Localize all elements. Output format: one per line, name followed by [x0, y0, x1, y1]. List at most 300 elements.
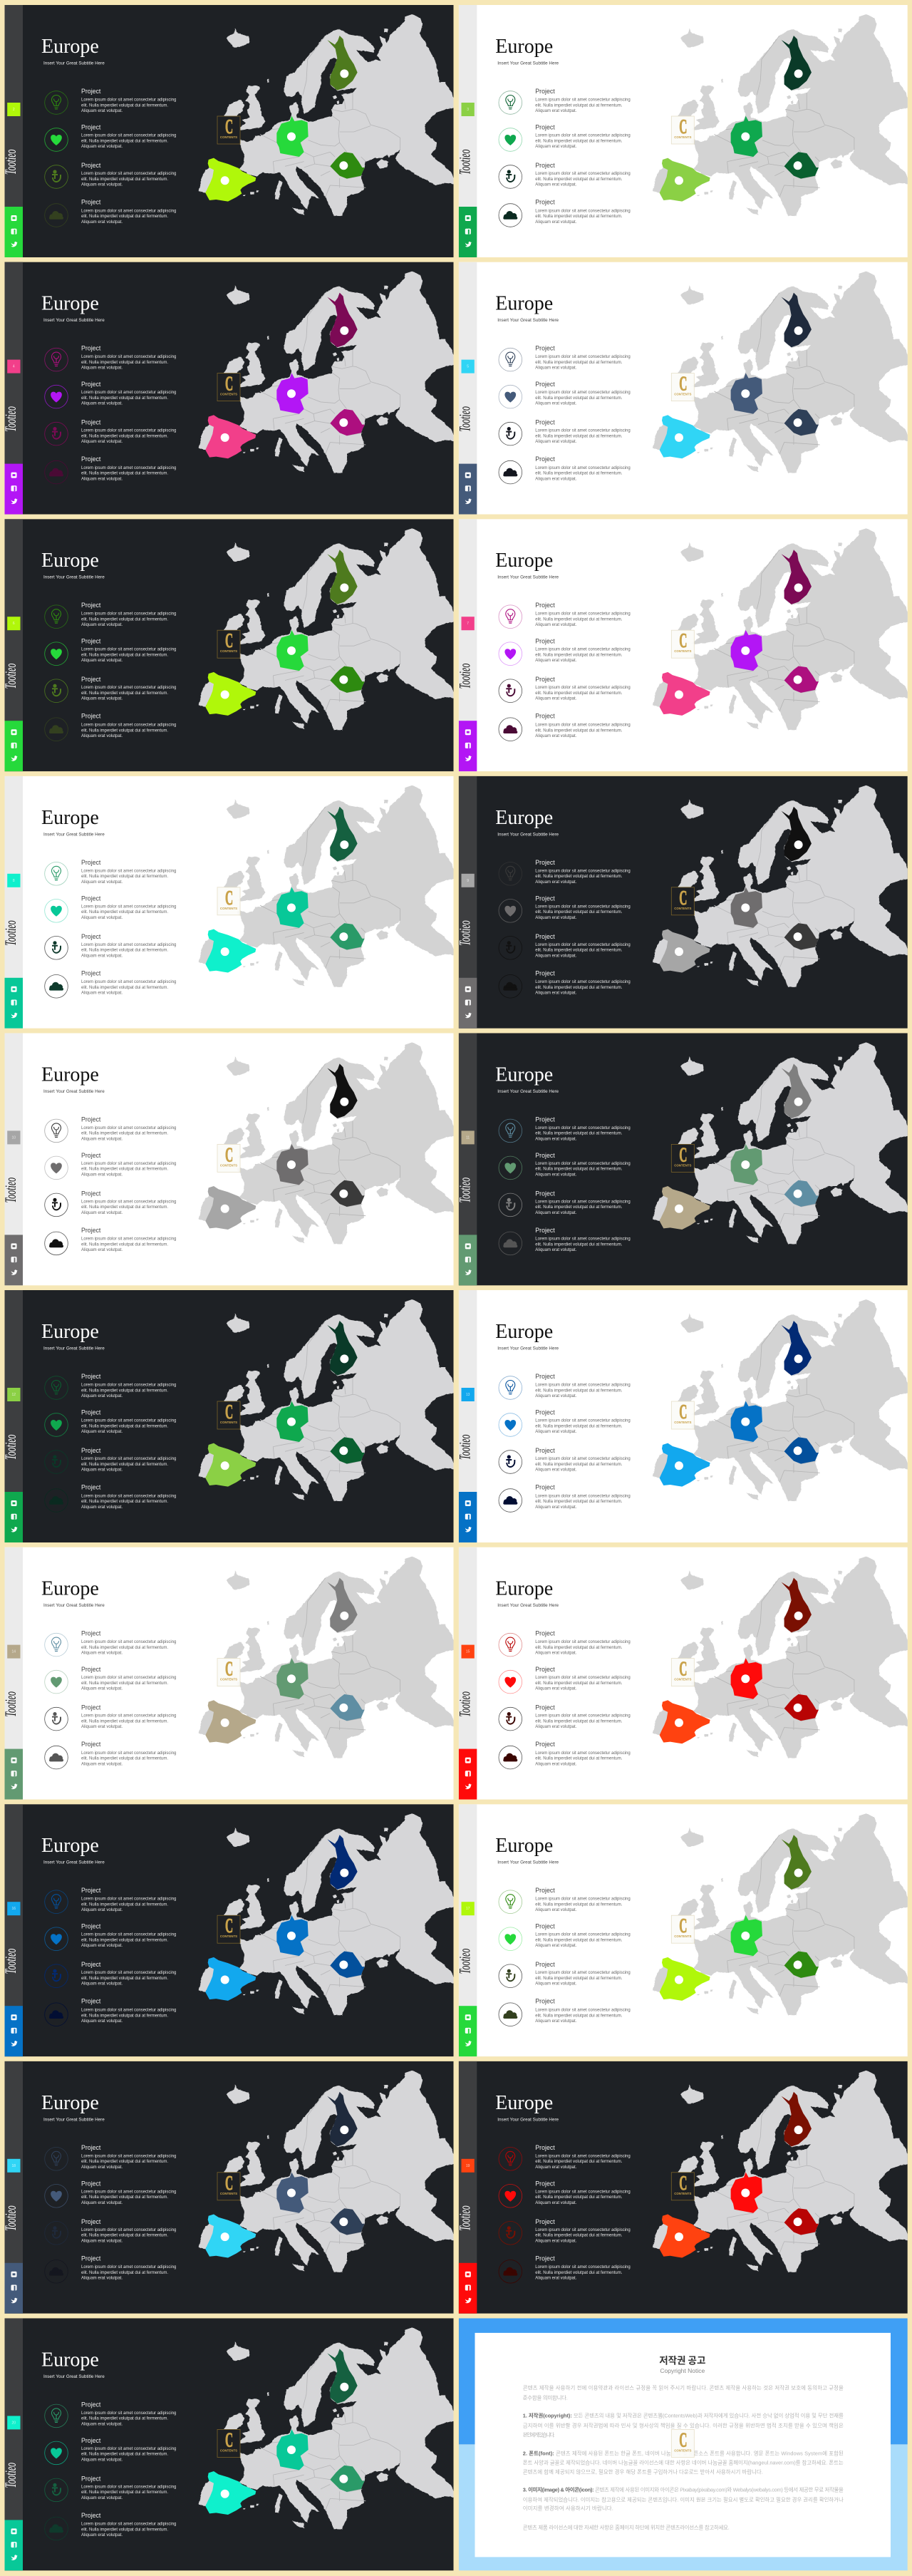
project 1 — [499, 1887, 631, 1913]
text 2: Lorem ipsum dolor sit amet consectetur adipiscing — [81, 391, 176, 395]
panel: slide 2 dark lime — [1, 5, 453, 257]
text 1: elit. Nulla imperdiet volutpat dui at fermentum. — [81, 2160, 168, 2164]
icon: bulb — [45, 1376, 68, 1399]
text 4: Project — [535, 1998, 555, 2005]
icon: bulb — [499, 1633, 522, 1657]
text 1: Lorem ipsum dolor sit amet consectetur adipiscing — [81, 1383, 176, 1387]
panel: slide 5 white navy — [455, 262, 908, 515]
icon: heart — [499, 1670, 522, 1694]
icon: cloud — [499, 1489, 522, 1512]
text 4 — [535, 1998, 631, 2024]
icon: bulb — [499, 1376, 522, 1399]
text 3: elit. Nulla imperdiet volutpat dui at fermentum. — [81, 434, 168, 438]
sidebar: 20 — [12, 2421, 16, 2425]
text 2: Aliquam erat volutpat. — [81, 2201, 123, 2205]
notice body: 이미지를 변경하여 사용하시기 바랍니다. — [523, 2505, 613, 2511]
sidebar: Tootieo — [455, 406, 473, 432]
country: Romania — [330, 1180, 365, 1207]
text 3: elit. Nulla imperdiet volutpat dui at fermentum. — [535, 1719, 623, 1724]
title: 저작권 공고 — [659, 2352, 705, 2366]
sidebar: 16 — [12, 1907, 16, 1911]
logo: CONTENTS — [674, 135, 691, 139]
text 2: Aliquam erat volutpat. — [535, 659, 577, 663]
text 2: Project — [535, 1408, 555, 1416]
icon: bulb — [45, 1633, 68, 1657]
text 4: Aliquam erat volutpat. — [81, 991, 123, 996]
text 1 — [81, 1373, 176, 1398]
subtitle: Insert Your Great Subtitle Here — [497, 1603, 559, 1608]
country: Romania — [784, 1952, 819, 1978]
text 1: Lorem ipsum dolor sit amet consectetur adipiscing — [81, 1897, 176, 1902]
text 2: Project — [535, 381, 555, 388]
country: Germany — [731, 373, 762, 414]
text 1: elit. Nulla imperdiet volutpat dui at fermentum. — [535, 875, 623, 879]
text 3: Project — [535, 1190, 555, 1197]
text 4: Project — [81, 455, 101, 463]
text 2 — [535, 381, 631, 406]
text 4: elit. Nulla imperdiet volutpat dui at fermentum. — [81, 1757, 168, 1761]
text 3: Lorem ipsum dolor sit amet consectetur adipiscing — [535, 1200, 631, 1204]
country: Spain — [660, 929, 710, 972]
text 2 — [81, 1923, 176, 1948]
logo: C — [225, 2172, 233, 2194]
text 4 — [81, 1998, 176, 2024]
text 4: elit. Nulla imperdiet volutpat dui at fermentum. — [535, 472, 623, 476]
text 3: elit. Nulla imperdiet volutpat dui at fermentum. — [81, 177, 168, 182]
map: Europe — [198, 1813, 456, 2016]
icon: person — [499, 1707, 522, 1731]
logo: CONTENTS — [674, 1163, 691, 1167]
text 3 — [535, 162, 631, 187]
logo: C — [225, 1915, 233, 1937]
text 1: elit. Nulla imperdiet volutpat dui at fermentum. — [81, 1389, 168, 1393]
icon: bulb — [45, 91, 68, 114]
text 4: Aliquam erat volutpat. — [535, 734, 577, 738]
text 2: Aliquam erat volutpat. — [81, 1173, 123, 1177]
text 1: Project — [535, 345, 555, 352]
icon: heart — [45, 128, 68, 151]
title: Europe — [495, 293, 553, 315]
text 4 — [535, 1741, 631, 1766]
icon: bulb — [45, 605, 68, 629]
project 4 — [45, 198, 176, 227]
subtitle: Insert Your Great Subtitle Here — [43, 1603, 105, 1608]
text 2 — [535, 1152, 631, 1177]
text 4: Aliquam erat volutpat. — [81, 1762, 123, 1766]
project 3 — [499, 1447, 631, 1473]
notice body: 콘텐츠 제작을 사용하기 전에 이용약관과 라이선스 규정을 꼭 읽어 주시기 바랍니다. 콘텐츠 제작을 사용하는 것은 저작권 보호에 동의하고 규정을 — [523, 2384, 844, 2391]
project 2 — [499, 1666, 631, 1694]
project 2 — [45, 1408, 176, 1436]
text 4: Lorem ipsum dolor sit amet consectetur adipiscing — [81, 466, 176, 470]
logo: C — [679, 887, 687, 909]
text 4: elit. Nulla imperdiet volutpat dui at fermentum. — [81, 1243, 168, 1247]
country: Germany — [731, 887, 762, 928]
project 3 — [45, 162, 176, 188]
map: Europe — [198, 785, 456, 987]
country: Spain — [205, 415, 256, 458]
text 4: elit. Nulla imperdiet volutpat dui at fermentum. — [81, 2528, 168, 2532]
text 2: Aliquam erat volutpat. — [81, 2458, 123, 2462]
map: Europe — [198, 528, 456, 731]
project 2 — [499, 1923, 631, 1950]
icon: heart — [499, 1156, 522, 1180]
project 4 — [45, 455, 176, 484]
text 3: Lorem ipsum dolor sit amet consectetur adipiscing — [81, 943, 176, 947]
text 3: Lorem ipsum dolor sit amet consectetur adipiscing — [81, 429, 176, 433]
title: Europe — [41, 550, 99, 572]
text 2: Project — [535, 1152, 555, 1159]
text 4 — [81, 969, 176, 996]
text 2: elit. Nulla imperdiet volutpat dui at fermentum. — [535, 1681, 623, 1686]
text 1: Project — [535, 602, 555, 609]
text 3 — [535, 676, 631, 701]
text 4: Aliquam erat volutpat. — [535, 1505, 577, 1510]
text 2: Lorem ipsum dolor sit amet consectetur adipiscing — [81, 2447, 176, 2451]
project 3 — [499, 1961, 631, 1987]
project 2 — [499, 2180, 631, 2207]
text 1: Lorem ipsum dolor sit amet consectetur adipiscing — [535, 1897, 631, 1902]
text 3: Lorem ipsum dolor sit amet consectetur adipiscing — [81, 686, 176, 690]
text 4: elit. Nulla imperdiet volutpat dui at fermentum. — [535, 986, 623, 990]
text 2: elit. Nulla imperdiet volutpat dui at fermentum. — [81, 1424, 168, 1428]
project 3 — [45, 1961, 176, 1987]
sidebar: Tootieo — [1, 1691, 19, 1717]
text 1: Lorem ipsum dolor sit amet consectetur adipiscing — [535, 612, 631, 617]
text 2: Project — [81, 638, 101, 645]
text 3: Aliquam erat volutpat. — [535, 1982, 577, 1987]
title: Europe — [495, 550, 553, 572]
text 4: Lorem ipsum dolor sit amet consectetur adipiscing — [81, 1751, 176, 1756]
sidebar: 4 — [13, 365, 15, 369]
sidebar: Tootieo — [1, 920, 19, 946]
text 3: Aliquam erat volutpat. — [535, 182, 577, 187]
text 4: elit. Nulla imperdiet volutpat dui at fermentum. — [81, 986, 168, 990]
text 4: Aliquam erat volutpat. — [535, 991, 577, 996]
project 3 — [45, 676, 176, 703]
icon: person — [45, 679, 68, 703]
panel: slide 11 dark tan — [455, 1033, 908, 1286]
text 2: Project — [81, 1152, 101, 1159]
text 2: Project — [535, 1666, 555, 1673]
sidebar: Tootieo — [1, 1178, 19, 1202]
panel: slide 8 white teal — [1, 776, 453, 1029]
text 1: Aliquam erat volutpat. — [535, 366, 577, 371]
project 4 — [499, 969, 631, 998]
text 3: Project — [535, 1447, 555, 1454]
project 3 — [45, 2218, 176, 2245]
logo — [671, 373, 694, 401]
text 3 — [535, 1704, 631, 1729]
title: Europe — [41, 293, 99, 315]
icon: bulb — [499, 1119, 522, 1143]
icon: person — [499, 1193, 522, 1217]
text 1 — [81, 1116, 176, 1141]
text 1: Project — [81, 859, 101, 866]
text 4: Lorem ipsum dolor sit amet consectetur adipiscing — [81, 2265, 176, 2270]
text 1: Lorem ipsum dolor sit amet consectetur adipiscing — [81, 355, 176, 359]
icon: cloud — [45, 1746, 68, 1769]
country: Germany — [276, 1144, 309, 1185]
sidebar — [1, 1547, 23, 1800]
text 1: Lorem ipsum dolor sit amet consectetur adipiscing — [535, 869, 631, 873]
logo — [671, 1658, 694, 1686]
text 3: elit. Nulla imperdiet volutpat dui at fermentum. — [81, 691, 168, 696]
notice body: 3. 이미지(image) & 아이콘(icon): 콘텐츠 제작에 사용된 이미지와 아이콘은 Pixabay(pixabay.com)와 Webalys(webalys.com) 등에서 제공한 무료 저작물을 — [523, 2486, 844, 2493]
text 4 — [81, 1227, 176, 1252]
logo: CONTENTS — [220, 907, 237, 910]
icon: bulb — [499, 605, 522, 629]
text 3: Lorem ipsum dolor sit amet consectetur adipiscing — [535, 686, 631, 690]
text 1 — [535, 859, 631, 885]
icon: heart — [499, 2184, 522, 2207]
text 3: Project — [535, 676, 555, 683]
text 2: Aliquam erat volutpat. — [535, 402, 577, 406]
logo: CONTENTS — [674, 1421, 691, 1424]
icon: cloud — [499, 204, 522, 227]
country: Finland — [782, 1321, 812, 1376]
sidebar — [1, 776, 23, 1029]
text 3 — [81, 1704, 176, 1729]
sidebar: Tootieo — [1, 1434, 19, 1460]
text 1: Aliquam erat volutpat. — [81, 1908, 123, 1912]
sidebar — [455, 5, 477, 257]
text 3: Project — [81, 676, 101, 683]
text 4 — [81, 2255, 176, 2281]
project 4 — [499, 455, 631, 484]
project 3 — [45, 1704, 176, 1731]
text 2: elit. Nulla imperdiet volutpat dui at fermentum. — [81, 1681, 168, 1686]
country: Finland — [782, 36, 812, 91]
icon: cloud — [499, 975, 522, 998]
text 3 — [81, 1190, 176, 1215]
country: Spain — [205, 2214, 256, 2257]
text 4: Project — [81, 2512, 101, 2519]
icon: heart — [45, 1670, 68, 1694]
text 3: Project — [81, 1190, 101, 1197]
text 4 — [535, 713, 631, 738]
project 1 — [45, 1373, 176, 1399]
text 3: elit. Nulla imperdiet volutpat dui at fermentum. — [81, 1719, 168, 1724]
text 1 — [535, 2144, 631, 2170]
text 2: elit. Nulla imperdiet volutpat dui at fermentum. — [535, 2195, 623, 2200]
text 4: Project — [81, 2255, 101, 2262]
country: Finland — [782, 807, 812, 861]
icon: heart — [45, 642, 68, 666]
text 4: Lorem ipsum dolor sit amet consectetur adipiscing — [81, 2523, 176, 2527]
text 1: Project — [535, 2144, 555, 2151]
logo — [217, 1915, 240, 1943]
subtitle: Insert Your Great Subtitle Here — [43, 1089, 105, 1094]
project 4 — [499, 2255, 631, 2283]
icon: heart — [499, 642, 522, 666]
project 2 — [45, 1666, 176, 1694]
text 3: Project — [81, 2475, 101, 2482]
country: Finland — [782, 293, 812, 347]
text 3 — [535, 2218, 631, 2243]
text 3: Project — [535, 1704, 555, 1711]
text 1: elit. Nulla imperdiet volutpat dui at fermentum. — [81, 875, 168, 879]
icon: person — [499, 2221, 522, 2245]
text 1: Aliquam erat volutpat. — [81, 109, 123, 113]
text 2: Aliquam erat volutpat. — [81, 145, 123, 149]
notice body: 금지하며 이를 위반할 경우 저작권법에 따라 민사 및 형사상의 책임을 질 수 있습니다. 이러한 규정을 위반하면 법적 조치를 받을 수 있으며 책임은 — [523, 2422, 844, 2428]
map: Europe — [653, 1557, 910, 1758]
text 1: Lorem ipsum dolor sit amet consectetur adipiscing — [535, 355, 631, 359]
text 3: Lorem ipsum dolor sit amet consectetur adipiscing — [81, 1200, 176, 1204]
text 3: Lorem ipsum dolor sit amet consectetur adipiscing — [81, 2228, 176, 2232]
text 1: Lorem ipsum dolor sit amet consectetur adipiscing — [81, 1126, 176, 1130]
text 1: Project — [81, 602, 101, 609]
text 1: Project — [81, 1373, 101, 1380]
country: Spain — [660, 1443, 710, 1487]
logo: CONTENTS — [674, 649, 691, 653]
text 1 — [81, 602, 176, 627]
subtitle: Insert Your Great Subtitle Here — [43, 1346, 105, 1351]
icon: heart — [45, 1927, 68, 1950]
project 3 — [499, 676, 631, 703]
text 4: elit. Nulla imperdiet volutpat dui at fermentum. — [81, 2271, 168, 2275]
text 1: Lorem ipsum dolor sit amet consectetur adipiscing — [535, 1126, 631, 1130]
text 3: elit. Nulla imperdiet volutpat dui at fermentum. — [81, 1205, 168, 1210]
logo — [217, 2172, 240, 2200]
sidebar — [455, 519, 477, 771]
text 3: Aliquam erat volutpat. — [81, 2496, 123, 2500]
text 2 — [535, 1408, 631, 1434]
text 2: Aliquam erat volutpat. — [535, 1687, 577, 1691]
text 4: Project — [81, 969, 101, 977]
icon: cloud — [45, 1489, 68, 1512]
icon: person — [499, 1451, 522, 1473]
country: Germany — [731, 1915, 762, 1956]
text 1: Aliquam erat volutpat. — [81, 1652, 123, 1656]
subtitle: Insert Your Great Subtitle Here — [43, 832, 105, 837]
notice body: 1. 저작권(copyright): 모든 콘텐츠의 내용 및 저작권은 콘텐츠웹(ContentsWeb)과 저작자에게 있습니다. 사전 승낙 없이 상업적 이용 및 무단 전재를 — [523, 2412, 844, 2418]
panel: slide 7 white pink — [455, 519, 908, 771]
country: Spain — [205, 1186, 256, 1230]
project 4 — [45, 1998, 176, 2026]
map: Europe — [653, 785, 910, 987]
logo — [671, 1401, 694, 1429]
project 3 — [499, 933, 631, 959]
country: Finland — [327, 2349, 358, 2404]
text 4: Lorem ipsum dolor sit amet consectetur adipiscing — [535, 1751, 631, 1756]
text 1: Aliquam erat volutpat. — [81, 366, 123, 371]
subtitle: Insert Your Great Subtitle Here — [43, 575, 105, 580]
icon: person — [45, 937, 68, 959]
icon: person — [45, 1707, 68, 1731]
country: Romania — [784, 1694, 819, 1721]
text 1: Lorem ipsum dolor sit amet consectetur adipiscing — [81, 2154, 176, 2158]
logo: C — [679, 629, 687, 651]
text 2: Aliquam erat volutpat. — [81, 1687, 123, 1691]
text 4: Lorem ipsum dolor sit amet consectetur adipiscing — [81, 2008, 176, 2012]
text 3: elit. Nulla imperdiet volutpat dui at fermentum. — [81, 1463, 168, 1467]
icon: heart — [499, 385, 522, 408]
logo — [217, 1658, 240, 1686]
text 2: Aliquam erat volutpat. — [535, 916, 577, 920]
text 4 — [535, 969, 631, 996]
text 1 — [535, 88, 631, 113]
country: Finland — [327, 550, 358, 604]
text 3: Aliquam erat volutpat. — [81, 697, 123, 701]
text 3 — [81, 419, 176, 444]
text 2: Aliquam erat volutpat. — [535, 2201, 577, 2205]
text 2: Project — [535, 124, 555, 131]
project 2 — [45, 638, 176, 666]
text 1: elit. Nulla imperdiet volutpat dui at fermentum. — [81, 103, 168, 108]
sidebar — [455, 1804, 477, 2056]
text 2 — [81, 1152, 176, 1177]
country: Spain — [205, 1443, 256, 1487]
country: Spain — [660, 1700, 710, 1743]
text 1: Aliquam erat volutpat. — [535, 1394, 577, 1398]
text 1: Project — [81, 1630, 101, 1637]
text 2: Lorem ipsum dolor sit amet consectetur adipiscing — [81, 1676, 176, 1680]
country: Romania — [784, 923, 819, 949]
text 4: Project — [535, 2255, 555, 2262]
text 3: elit. Nulla imperdiet volutpat dui at fermentum. — [535, 434, 623, 438]
sidebar: Tootieo — [1, 2205, 19, 2231]
panel: slide 10 white gray — [1, 1034, 453, 1286]
text 4: Aliquam erat volutpat. — [535, 2019, 577, 2024]
country: Finland — [782, 550, 812, 604]
sidebar: 3 — [467, 108, 469, 112]
project 2 — [499, 124, 631, 151]
panel: slide 20 dark teal — [1, 2318, 453, 2570]
text 4: Project — [81, 1484, 101, 1491]
logo: C — [225, 1401, 233, 1423]
text 4: Aliquam erat volutpat. — [81, 1505, 123, 1510]
text 3 — [81, 1447, 176, 1473]
sidebar: Tootieo — [455, 664, 473, 689]
text 1: Aliquam erat volutpat. — [81, 1394, 123, 1398]
text 4: elit. Nulla imperdiet volutpat dui at fermentum. — [81, 728, 168, 733]
logo: CONTENTS — [674, 2448, 691, 2452]
logo: CONTENTS — [674, 393, 691, 396]
text 4: Lorem ipsum dolor sit amet consectetur adipiscing — [535, 1237, 631, 1242]
text 3: Aliquam erat volutpat. — [535, 2239, 577, 2243]
logo — [217, 1144, 240, 1172]
sidebar: Tootieo — [455, 149, 473, 175]
project 4 — [499, 1998, 631, 2026]
title: Europe — [41, 1835, 99, 1857]
text 4: Project — [81, 1741, 101, 1748]
project 1 — [45, 1887, 176, 1913]
text 1: Project — [535, 1373, 555, 1380]
project 4 — [45, 1741, 176, 1769]
sidebar: 17 — [466, 1907, 470, 1911]
text 3: Project — [535, 2218, 555, 2225]
text 2: Lorem ipsum dolor sit amet consectetur adipiscing — [81, 905, 176, 909]
subtitle: Insert Your Great Subtitle Here — [497, 575, 559, 580]
text 3: Project — [81, 419, 101, 426]
project 1 — [499, 2144, 631, 2170]
text 2 — [535, 638, 631, 663]
sidebar: Tootieo — [455, 1691, 473, 1717]
text 3: Aliquam erat volutpat. — [81, 1982, 123, 1987]
panel: slide 15 white red — [455, 1547, 908, 1800]
text 2: Project — [81, 1666, 101, 1673]
title: Europe — [495, 1321, 553, 1343]
panel: slide 6 dark lime — [1, 519, 453, 771]
logo — [217, 629, 240, 658]
map: Europe — [198, 2071, 456, 2272]
text 4 — [535, 198, 631, 225]
text 3: Lorem ipsum dolor sit amet consectetur adipiscing — [535, 429, 631, 433]
text 4: elit. Nulla imperdiet volutpat dui at fermentum. — [535, 728, 623, 733]
subtitle: Insert Your Great Subtitle Here — [497, 832, 559, 837]
